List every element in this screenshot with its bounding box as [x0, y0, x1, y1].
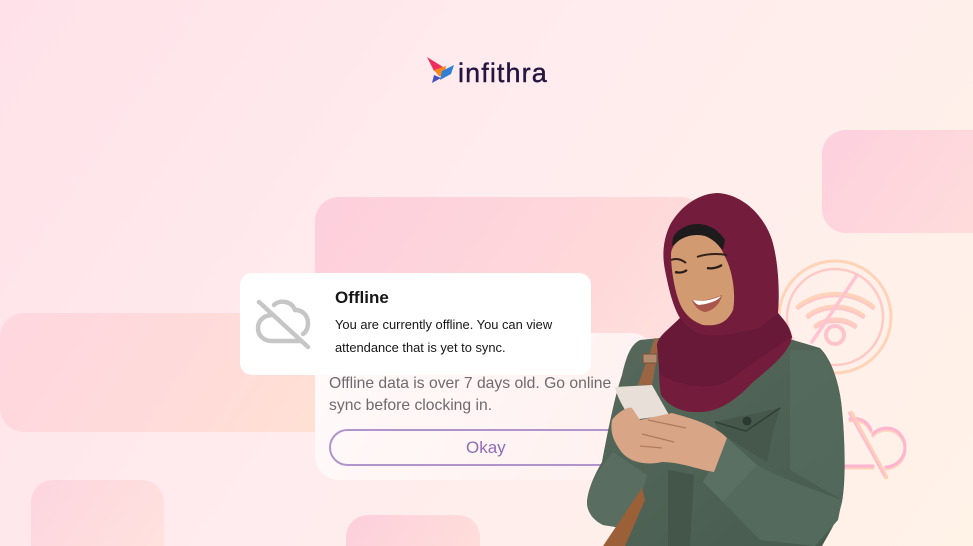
faded dialog heading: Oops! Time to Sync: [330, 351, 499, 371]
notification title: Offline: [335, 288, 389, 307]
panel: background block center: [315, 197, 705, 347]
face: [671, 235, 734, 325]
panel: background block bottom center: [346, 515, 480, 546]
panel: background block top right: [822, 130, 973, 233]
dialog body text: Offline data is over 7 days old. Go online: [329, 375, 611, 392]
panel: sync dialog card: [315, 333, 655, 480]
icon: crossed cloud: [256, 300, 310, 350]
phone: [615, 385, 669, 420]
scarf: [657, 193, 792, 412]
eyes and smile: [671, 254, 727, 263]
panel: offline notification card: [240, 273, 591, 375]
notification message: [335, 317, 552, 354]
jacket: [587, 338, 845, 546]
dialog body text: sync before clocking in.: [329, 397, 492, 414]
right cuff and forearm: [703, 438, 757, 502]
under cap: [672, 224, 725, 250]
logo: [427, 57, 548, 88]
panel: background block bottom left: [31, 480, 164, 546]
logo wordmark: infithra: [458, 58, 548, 88]
icon: logo bird: [427, 57, 454, 83]
bag strap: [638, 338, 660, 385]
okay button: Okay: [466, 438, 506, 457]
hands: [611, 408, 727, 472]
dialog body text: [329, 375, 611, 414]
notification message: You are currently offline. You can view: [335, 317, 552, 332]
okay button: [329, 429, 653, 466]
panel: background block left: [0, 313, 330, 432]
notification message: attendance that is yet to sync.: [335, 340, 506, 354]
jacket sleeve left: [587, 452, 647, 528]
jacket pocket and seams: [715, 408, 780, 462]
